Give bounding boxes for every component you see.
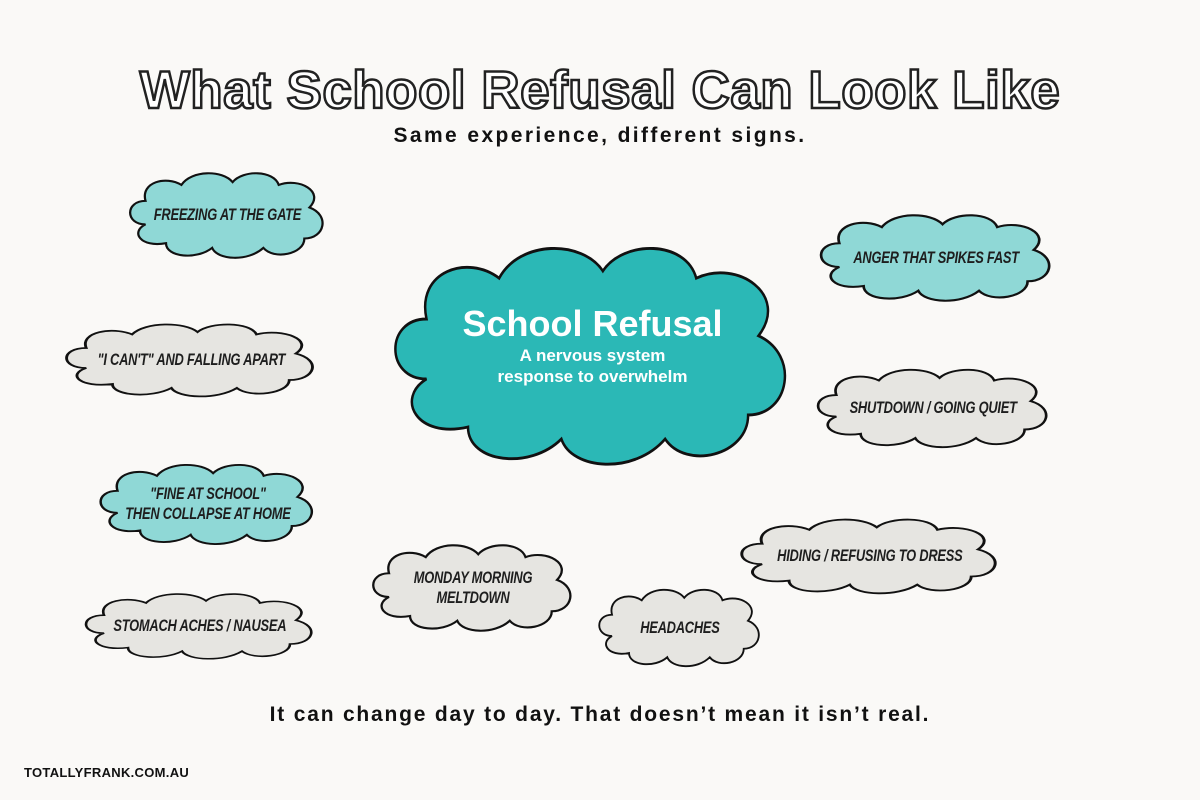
central text: response to overwhelm <box>498 367 687 386</box>
cloud: monday morning <box>372 544 572 632</box>
cloud: headaches <box>598 588 760 668</box>
central text <box>462 303 723 386</box>
cloud: i can't <box>65 324 314 398</box>
cloud: anger: ANGER THAT SPIKES FAST <box>854 248 1019 266</box>
cloud: freezing at the gate: FREEZING AT THE GATE <box>154 206 301 224</box>
central text: School Refusal <box>462 303 723 344</box>
cloud: i can't: "I CAN'T" AND FALLING APART <box>97 351 285 369</box>
footer message: It can change day to day. That doesn’t mean it isn’t real. <box>270 703 930 726</box>
central text: A nervous system <box>520 346 665 365</box>
cloud: anger <box>820 214 1050 302</box>
cloud: shutdown <box>816 368 1048 448</box>
cloud: fine at school: THEN COLLAPSE AT HOME <box>125 505 290 523</box>
cloud: stomach aches: STOMACH ACHES / NAUSEA <box>114 617 286 635</box>
cloud: shutdown: SHUTDOWN / GOING QUIET <box>850 399 1017 417</box>
cloud: hiding <box>740 518 997 594</box>
subtitle: Same experience, different signs. <box>394 124 806 147</box>
cloud: monday morning: MONDAY MORNING <box>414 568 532 586</box>
central cloud: school refusal <box>394 247 786 466</box>
cloud: stomach aches <box>84 593 313 660</box>
cloud: freezing at the gate <box>129 172 324 259</box>
website credit: TOTALLYFRANK.COM.AU <box>24 765 189 780</box>
cloud: monday morning: MELTDOWN <box>437 588 509 606</box>
cloud: fine at school <box>99 464 314 545</box>
cloud: hiding: HIDING / REFUSING TO DRESS <box>777 547 963 565</box>
title: What School Refusal Can Look Like <box>140 61 1060 120</box>
cloud: headaches: HEADACHES <box>640 618 720 636</box>
cloud: fine at school: "FINE AT SCHOOL" <box>150 485 265 503</box>
